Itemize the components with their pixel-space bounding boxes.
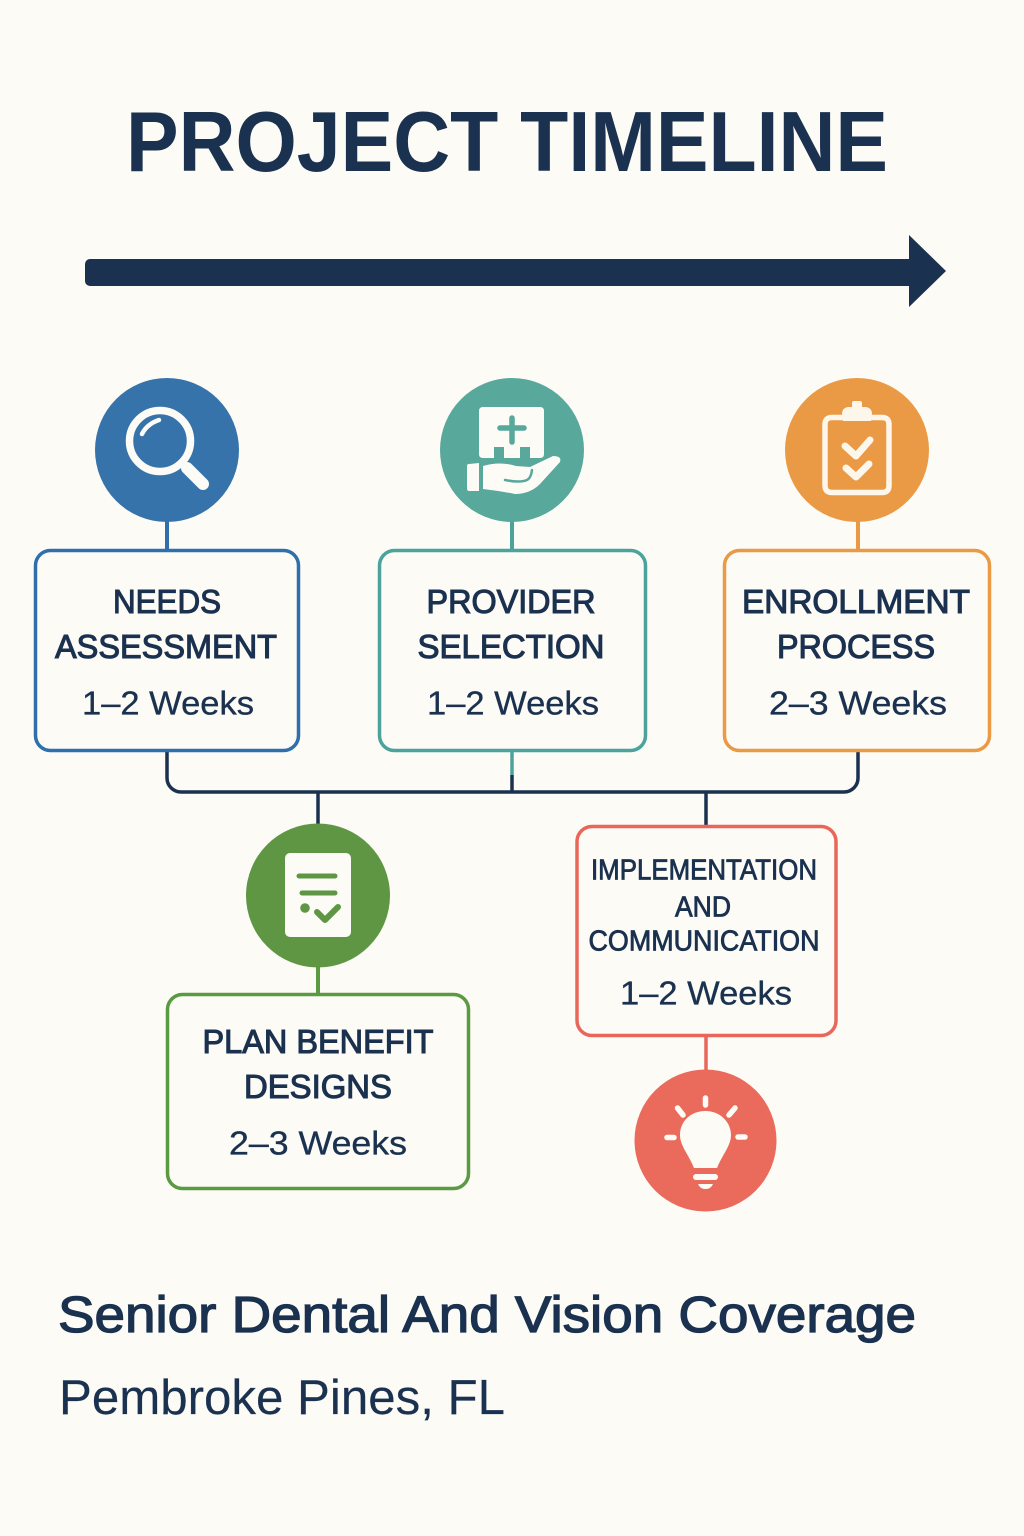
box: implementation and communication text bbox=[577, 826, 836, 1036]
box: implementation and communication text: COMMUNICATION bbox=[588, 926, 820, 958]
icon: light bulb bbox=[634, 1070, 776, 1212]
box: plan benefit designs text bbox=[168, 994, 468, 1188]
title: PROJECT TIMELINE bbox=[126, 95, 888, 190]
connector: bracket joining the upper steps bbox=[167, 751, 858, 827]
icon: document with check bbox=[246, 824, 390, 968]
box: enrollment process text: ENROLLMENT bbox=[742, 583, 970, 620]
panel: enrollment process bbox=[724, 378, 990, 750]
panel: needs assessment bbox=[36, 378, 298, 750]
footer location: Pembroke Pines, FL bbox=[59, 1371, 505, 1425]
box: needs assessment text: NEEDS bbox=[113, 583, 221, 620]
box: provider selection text: PROVIDER bbox=[426, 583, 596, 620]
panel: provider selection bbox=[380, 378, 646, 775]
footer heading: Senior Dental And Vision Coverage bbox=[58, 1286, 916, 1343]
box: provider selection text: 1–2 Weeks bbox=[427, 684, 599, 722]
box: needs assessment text bbox=[36, 550, 298, 750]
box: plan benefit designs text: 2–3 Weeks bbox=[229, 1124, 407, 1162]
box: implementation and communication text: IMPLEMENTATION bbox=[591, 854, 817, 886]
box: enrollment process text: PROCESS bbox=[777, 628, 935, 665]
box: plan benefit designs text: DESIGNS bbox=[244, 1068, 392, 1105]
box: needs assessment text: 1–2 Weeks bbox=[82, 684, 254, 722]
arrow: timeline direction bbox=[85, 235, 946, 307]
box: provider selection text bbox=[380, 550, 646, 750]
icon: hand holding medical building bbox=[440, 378, 584, 522]
box: needs assessment text: ASSESSMENT bbox=[55, 628, 277, 665]
box: plan benefit designs text: PLAN BENEFIT bbox=[202, 1023, 434, 1060]
box: enrollment process text bbox=[724, 550, 990, 750]
icon: magnifying glass bbox=[95, 378, 239, 522]
box: enrollment process text: 2–3 Weeks bbox=[769, 684, 947, 722]
icon: clipboard with checks bbox=[785, 378, 929, 522]
box: provider selection text: SELECTION bbox=[418, 628, 604, 665]
panel: implementation and communication bbox=[577, 826, 836, 1212]
panel: plan benefit designs bbox=[168, 824, 468, 1188]
box: implementation and communication text: AND bbox=[675, 892, 731, 924]
box: implementation and communication text: 1–2 Weeks bbox=[620, 974, 792, 1012]
